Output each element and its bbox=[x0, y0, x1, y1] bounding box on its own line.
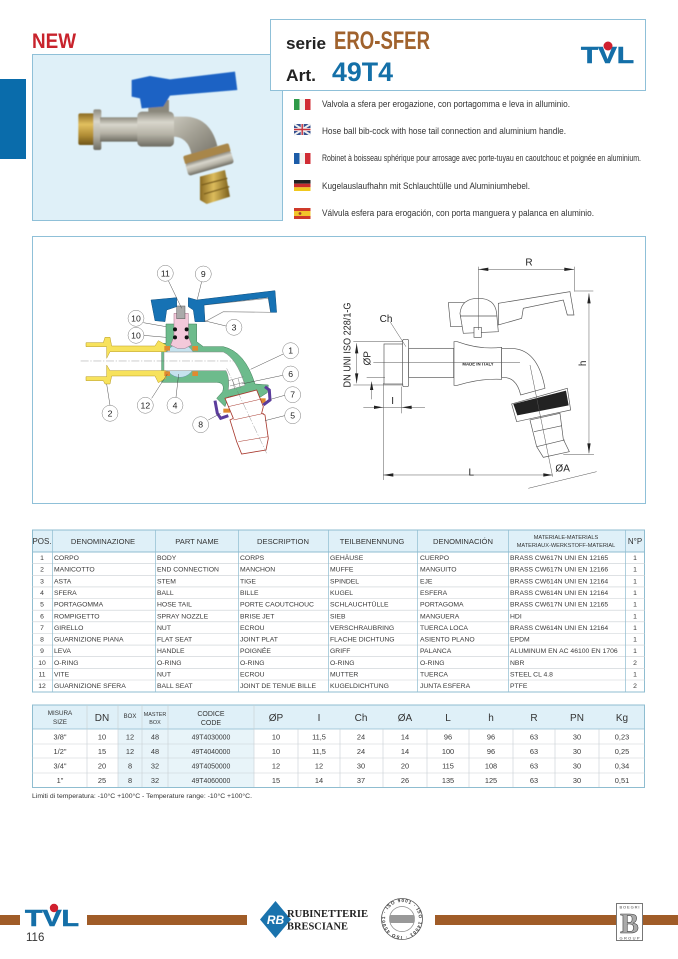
table rows: 12 bbox=[38, 683, 46, 690]
table rows: TIGE bbox=[240, 578, 256, 585]
ball bbox=[165, 344, 195, 377]
arrowheads bbox=[355, 268, 591, 477]
table rows: CORPS bbox=[240, 555, 265, 562]
dimensions header: I bbox=[318, 713, 320, 724]
dimensions rows: 10 bbox=[272, 747, 280, 756]
table header: DESCRIPTION bbox=[257, 537, 309, 546]
dimensions rows: 30 bbox=[357, 761, 365, 770]
group logo bbox=[616, 904, 642, 940]
table rows: O-RING bbox=[330, 660, 355, 667]
table rows: STEM bbox=[157, 578, 176, 585]
table header bbox=[32, 535, 642, 549]
table rows: PTFE bbox=[510, 683, 528, 690]
dimensions rows: 20 bbox=[401, 761, 409, 770]
multilingual descriptions bbox=[294, 99, 641, 219]
table rows: ESFERA bbox=[420, 590, 448, 597]
table rows: HOSE TAIL bbox=[157, 602, 192, 609]
dimensions rows bbox=[54, 732, 629, 785]
table rows: 2 bbox=[633, 683, 637, 690]
dimensions rows: 48 bbox=[151, 732, 159, 742]
table rows: POIGNÉE bbox=[240, 646, 271, 655]
callouts: 10 bbox=[131, 330, 141, 340]
TVL logo: TVL bbox=[581, 42, 634, 68]
dimensions rows: 108 bbox=[485, 761, 497, 770]
table rows: 1 bbox=[40, 555, 44, 562]
table rows: JOINT DE TENUE BILLE bbox=[240, 683, 317, 690]
dimensions rows: 49T4050000 bbox=[192, 763, 231, 770]
table rows: ECROU bbox=[240, 672, 265, 678]
table rows: MUFFE bbox=[330, 567, 354, 574]
table rows: JUNTA ESFERA bbox=[420, 683, 471, 690]
table rows: NUT bbox=[157, 672, 171, 678]
dimensions rows: 30 bbox=[573, 761, 581, 770]
article number: 49T4 bbox=[332, 57, 393, 87]
dimensions rows: 1" bbox=[57, 776, 64, 785]
dimensions rows: 24 bbox=[357, 747, 365, 756]
product photo: ball bib-cock bbox=[78, 72, 237, 204]
table rows: PORTAGOMMA bbox=[54, 602, 104, 609]
dimensions rows: 26 bbox=[401, 776, 409, 785]
spray nozzle bbox=[228, 377, 245, 389]
table rows: NUT bbox=[157, 625, 171, 632]
dimensions rows: 0,51 bbox=[615, 776, 629, 785]
dimensions rows: 32 bbox=[151, 776, 159, 785]
dimensions rows: 0,23 bbox=[615, 732, 629, 742]
dimensions header background bbox=[32, 705, 645, 729]
flag: Germany bbox=[294, 180, 310, 191]
Rubinetterie Bresciane logo: BRESCIANE bbox=[287, 920, 348, 932]
table rows: 10 bbox=[38, 660, 46, 667]
table rows: 1 bbox=[633, 637, 637, 644]
flag: Spain bbox=[294, 208, 310, 219]
table rows: HDI bbox=[510, 613, 522, 620]
table rows: VITE bbox=[54, 672, 70, 678]
table rows: BALL bbox=[157, 590, 174, 597]
table rows: O-RING bbox=[54, 660, 79, 667]
dimensions rows: 15 bbox=[272, 776, 280, 785]
ball seats bbox=[164, 346, 266, 413]
dimension labels: ØA bbox=[555, 464, 570, 475]
table rows: 3 bbox=[40, 578, 44, 585]
O-rings bbox=[173, 327, 189, 339]
table rows: 1 bbox=[633, 648, 637, 655]
table rows: EPDM bbox=[510, 637, 530, 644]
table rows: FLAT SEAT bbox=[157, 637, 192, 644]
article number bbox=[286, 57, 393, 87]
dimensions rows: 49T4040000 bbox=[192, 749, 231, 756]
table rows: TUERCA LOCA bbox=[420, 625, 468, 632]
table rows: 1 bbox=[633, 625, 637, 632]
table rows: 11 bbox=[38, 672, 46, 678]
dimensions header: R bbox=[530, 713, 538, 724]
table rows: GUARNIZIONE SFERA bbox=[54, 683, 126, 690]
table rows: MANICOTTO bbox=[54, 567, 95, 574]
table rows: EJE bbox=[420, 578, 433, 585]
table rows: 6 bbox=[40, 613, 44, 620]
dimensions header: PN bbox=[570, 713, 584, 724]
dimensions rows: 12 bbox=[315, 761, 323, 770]
shaded box and code columns bbox=[118, 729, 254, 787]
table rows: BRASS CW617N UNI EN 12166 bbox=[510, 567, 608, 574]
table rows: HANDLE bbox=[157, 648, 185, 655]
table rows: TUERCA bbox=[420, 672, 448, 678]
footer bbox=[0, 898, 678, 944]
dimensional drawing bbox=[342, 257, 597, 488]
dimensions rows: 0,25 bbox=[615, 747, 629, 756]
table rows: JOINT PLAT bbox=[240, 637, 278, 644]
callouts: 2 bbox=[108, 408, 113, 418]
table rows bbox=[38, 554, 637, 690]
NEW label: NEW bbox=[32, 30, 76, 53]
callouts: 3 bbox=[232, 322, 237, 332]
table rows: ALUMINUM EN AC 46100 EN 1706 bbox=[510, 648, 618, 655]
dimensions header: MASTER bbox=[144, 712, 166, 718]
callouts: 8 bbox=[198, 420, 203, 430]
dimensions rows: 49T4060000 bbox=[192, 778, 231, 785]
dimensions rows: 96 bbox=[487, 732, 495, 742]
group logo: B bbox=[620, 909, 639, 940]
table rows: CUERPO bbox=[420, 555, 449, 562]
dimensions header: DN bbox=[95, 713, 109, 724]
dimensions rows: 12 bbox=[126, 747, 134, 756]
callouts: 5 bbox=[290, 411, 295, 421]
table rows: 1 bbox=[633, 672, 637, 678]
table rows: 5 bbox=[40, 602, 44, 609]
table rows: 2 bbox=[633, 660, 637, 667]
dimension labels: R bbox=[525, 257, 533, 268]
table rows: 1 bbox=[633, 590, 637, 597]
table header: MATERIAUX-WERKSTOFF-MATERIAL bbox=[517, 543, 615, 549]
table rows: 7 bbox=[40, 625, 44, 632]
dimensions grid bbox=[32, 705, 645, 788]
table rows: END CONNECTION bbox=[157, 567, 219, 574]
dimensions header: Ch bbox=[355, 713, 367, 724]
table rows: MUTTER bbox=[330, 672, 358, 678]
dimensions rows: 125 bbox=[485, 776, 497, 785]
table header: DENOMINACIÓN bbox=[433, 537, 493, 546]
Italian text: Valvola a sfera per erogazione, con portagomma e leva in alluminio. bbox=[322, 99, 570, 110]
dimensions rows: 14 bbox=[401, 747, 409, 756]
dimensions rows: 3/8" bbox=[54, 732, 67, 742]
table rows: O-RING bbox=[420, 660, 445, 667]
dimensions rows: 14 bbox=[401, 732, 409, 742]
table rows: NBR bbox=[510, 660, 524, 667]
table rows: PORTAGOMA bbox=[420, 602, 464, 609]
callouts: 12 bbox=[141, 400, 150, 410]
table rows: GRIFF bbox=[330, 648, 350, 655]
dimensions rows: 1/2" bbox=[54, 747, 67, 756]
table rows: BALL SEAT bbox=[157, 683, 193, 690]
made in Italy mark: MADE IN ITALY bbox=[462, 362, 494, 367]
table rows: 4 bbox=[40, 590, 44, 597]
table rows: 8 bbox=[40, 637, 44, 644]
dimensions rows: 100 bbox=[442, 747, 454, 756]
Rubinetterie Bresciane logo: RB bbox=[267, 913, 284, 927]
dimensions table bbox=[32, 705, 645, 788]
ISO certification seal: ISO 45001 · ISO 9001 · ISO 14001 · bbox=[382, 898, 422, 940]
footer TVL logo: TVL bbox=[25, 905, 79, 931]
blue handle bbox=[151, 291, 277, 322]
black gasket bbox=[513, 391, 569, 415]
dimensions rows: 49T4030000 bbox=[192, 734, 231, 742]
table rows: ECROU bbox=[240, 625, 265, 632]
series name: ERO-SFER bbox=[334, 27, 430, 55]
dimensions rows: 63 bbox=[530, 747, 538, 756]
group logo: GROUP bbox=[620, 936, 640, 940]
dimension labels: Ch bbox=[380, 314, 392, 325]
dimensions rows: 14 bbox=[315, 776, 323, 785]
centre line bbox=[81, 361, 267, 453]
table rows: BILLE bbox=[240, 590, 259, 597]
table rows: CORPO bbox=[54, 555, 79, 562]
dimensions rows: 10 bbox=[98, 732, 106, 742]
table header: DENOMINAZIONE bbox=[71, 537, 135, 546]
dimension labels: ØP bbox=[363, 351, 374, 366]
dimension labels: I bbox=[391, 396, 394, 407]
dimensions rows: 25 bbox=[98, 776, 106, 785]
table rows: VERSCHRAUBRING bbox=[330, 625, 394, 632]
callouts: 10 bbox=[131, 313, 141, 323]
dimensions rows: 8 bbox=[128, 776, 132, 785]
table header: TEILBENENNUNG bbox=[340, 537, 404, 546]
table rows: MANGUITO bbox=[420, 567, 457, 574]
table rows: PORTE CAOUTCHOUC bbox=[240, 602, 314, 609]
screw bbox=[177, 306, 185, 319]
dimensions rows: 0,34 bbox=[615, 761, 629, 770]
table rows: KUGELDICHTUNG bbox=[330, 683, 389, 690]
table rows: 9 bbox=[40, 648, 44, 655]
dimensions rows: 63 bbox=[530, 732, 538, 742]
table grid bbox=[32, 530, 645, 692]
dimensions header: BOX bbox=[124, 714, 136, 720]
table rows: GUARNIZIONE PIANA bbox=[54, 637, 124, 644]
dimension labels: DN UNI ISO 228/1-G bbox=[342, 302, 353, 387]
table rows: PALANCA bbox=[420, 648, 452, 655]
nut bbox=[215, 387, 270, 418]
dimensions rows: 30 bbox=[573, 776, 581, 785]
dimensions header: SIZE bbox=[53, 719, 67, 726]
hose tail bbox=[225, 390, 268, 454]
table rows: ROMPIGETTO bbox=[54, 613, 100, 620]
dimensions rows: 32 bbox=[151, 761, 159, 770]
table rows: BRASS CW617N UNI EN 12165 bbox=[510, 555, 608, 562]
callouts: 11 bbox=[161, 268, 170, 278]
table rows: STEEL CL 4.8 bbox=[510, 672, 553, 678]
callouts: 1 bbox=[288, 346, 293, 356]
table rows: GEHÄUSE bbox=[330, 554, 364, 562]
table rows: BRASS CW617N UNI EN 12165 bbox=[510, 602, 608, 609]
dimensions header: CODE bbox=[201, 720, 221, 727]
dimensions rows: 11,5 bbox=[312, 747, 326, 756]
table rows: 1 bbox=[633, 613, 637, 620]
table rows: MANCHON bbox=[240, 567, 275, 574]
dimension labels: L bbox=[469, 467, 475, 478]
dimension labels bbox=[342, 257, 589, 478]
dimensions header bbox=[48, 710, 628, 727]
dimensions rows: 30 bbox=[573, 747, 581, 756]
dimensions rows: 48 bbox=[151, 747, 159, 756]
table header: MATERIALE-MATERIALS bbox=[534, 535, 598, 541]
table rows: SPRAY NOZZLE bbox=[157, 613, 209, 620]
table rows: BRASS CW614N UNI EN 12164 bbox=[510, 590, 608, 597]
parts table bbox=[32, 530, 645, 692]
Rubinetterie Bresciane logo bbox=[260, 901, 368, 938]
dimensions header: Kg bbox=[616, 713, 628, 724]
panel: technical drawings bbox=[32, 236, 646, 504]
dimensions rows: 10 bbox=[272, 732, 280, 742]
green body bbox=[162, 324, 268, 407]
dimensions rows: 63 bbox=[530, 776, 538, 785]
dimensions rows: 8 bbox=[128, 761, 132, 770]
dimension labels: h bbox=[578, 361, 589, 366]
dimensions rows: 96 bbox=[444, 732, 452, 742]
panel: product photo bbox=[32, 54, 282, 220]
page number: 116 bbox=[26, 932, 44, 944]
table rows: BRASS CW614N UNI EN 12164 bbox=[510, 578, 608, 585]
Spanish text: Válvula esfera para erogación, con porta manguera y palanca en aluminio. bbox=[322, 208, 594, 219]
dimensions header: h bbox=[488, 713, 494, 724]
table rows: SPINDEL bbox=[330, 578, 359, 585]
dimensions rows: 15 bbox=[98, 747, 106, 756]
footer bars bbox=[0, 915, 678, 925]
side tab bbox=[0, 79, 26, 159]
dimension lines bbox=[353, 267, 597, 488]
German text: Kugelauslaufhahn mit Schlauchtülle und Aluminiumhebel. bbox=[322, 181, 530, 192]
flag: Italy bbox=[294, 99, 310, 110]
dimensions rows: 11,5 bbox=[312, 732, 326, 742]
table rows: SFERA bbox=[54, 590, 77, 597]
dimensions rows: 20 bbox=[98, 761, 106, 770]
callouts: 7 bbox=[290, 390, 295, 400]
table header background bbox=[32, 530, 645, 552]
callouts bbox=[102, 265, 301, 433]
table rows: 1 bbox=[633, 578, 637, 585]
table rows: 1 bbox=[633, 567, 637, 574]
English text: Hose ball bib-cock with hose tail connection and aluminium handle. bbox=[322, 126, 566, 137]
dimensions rows: 37 bbox=[357, 776, 365, 785]
callouts: 6 bbox=[288, 369, 293, 379]
handle outline bbox=[204, 298, 271, 322]
title box bbox=[270, 20, 646, 90]
table rows: GIRELLO bbox=[54, 625, 83, 632]
dimensions rows: 135 bbox=[442, 776, 454, 785]
valve outline bbox=[384, 292, 574, 457]
callouts: 9 bbox=[201, 269, 206, 279]
dimensions header: L bbox=[445, 713, 451, 724]
group logo: BOEGRI bbox=[620, 904, 640, 910]
table header: POS. bbox=[32, 537, 52, 546]
series name bbox=[286, 27, 430, 55]
table rows: FLACHE DICHTUNG bbox=[330, 637, 395, 644]
table rows: BRASS CW614N UNI EN 12164 bbox=[510, 625, 608, 632]
dimensions rows: 24 bbox=[357, 732, 365, 742]
dimensions header: BOX bbox=[149, 720, 161, 726]
temperature note: Limiti di temperatura: -10°C +100°C - Temperature range: -10°C +100°C. bbox=[32, 792, 252, 800]
dimensions header: MISURA bbox=[48, 710, 73, 717]
dimensions rows: 12 bbox=[126, 732, 134, 742]
pink stem bbox=[171, 313, 192, 348]
table rows: ASTA bbox=[54, 578, 72, 585]
flag: UK bbox=[294, 124, 310, 135]
table rows: BODY bbox=[157, 555, 177, 562]
table header: N°P bbox=[628, 537, 642, 546]
dimensions rows: 12 bbox=[272, 761, 280, 770]
table rows: O-RING bbox=[240, 660, 265, 667]
table rows: SIEB bbox=[330, 613, 346, 620]
bore bbox=[164, 352, 245, 390]
Rubinetterie Bresciane logo: RUBINETTERIE bbox=[287, 908, 368, 920]
callouts: 4 bbox=[173, 400, 178, 410]
table rows: LEVA bbox=[54, 648, 71, 655]
table rows: 1 bbox=[633, 555, 637, 562]
table rows: 2 bbox=[40, 567, 44, 574]
dimensions rows: 30 bbox=[573, 732, 581, 742]
dimensions header: ØA bbox=[398, 713, 413, 724]
table rows: 1 bbox=[633, 602, 637, 609]
dimensions rows: 115 bbox=[442, 761, 454, 770]
dimensions rows: 96 bbox=[487, 747, 495, 756]
dimensions header: CODICE bbox=[197, 711, 225, 718]
dimensions header: ØP bbox=[269, 713, 284, 724]
cross-section diagram bbox=[81, 265, 301, 454]
table rows: ASIENTO PLANO bbox=[420, 637, 475, 644]
end connection bbox=[86, 337, 166, 384]
table rows: O-RING bbox=[157, 660, 182, 667]
table rows: MANGUERA bbox=[420, 613, 460, 620]
table rows: BRISE JET bbox=[240, 613, 274, 620]
series name: serie bbox=[286, 34, 326, 53]
table rows: KUGEL bbox=[330, 590, 353, 597]
flag: France bbox=[294, 153, 310, 164]
dimensions rows: 3/4" bbox=[54, 761, 67, 770]
article number: Art. bbox=[286, 66, 316, 85]
dimensions rows: 63 bbox=[530, 761, 538, 770]
table rows: SCHLAUCHTÜLLE bbox=[330, 601, 389, 609]
table header: PART NAME bbox=[175, 537, 219, 546]
